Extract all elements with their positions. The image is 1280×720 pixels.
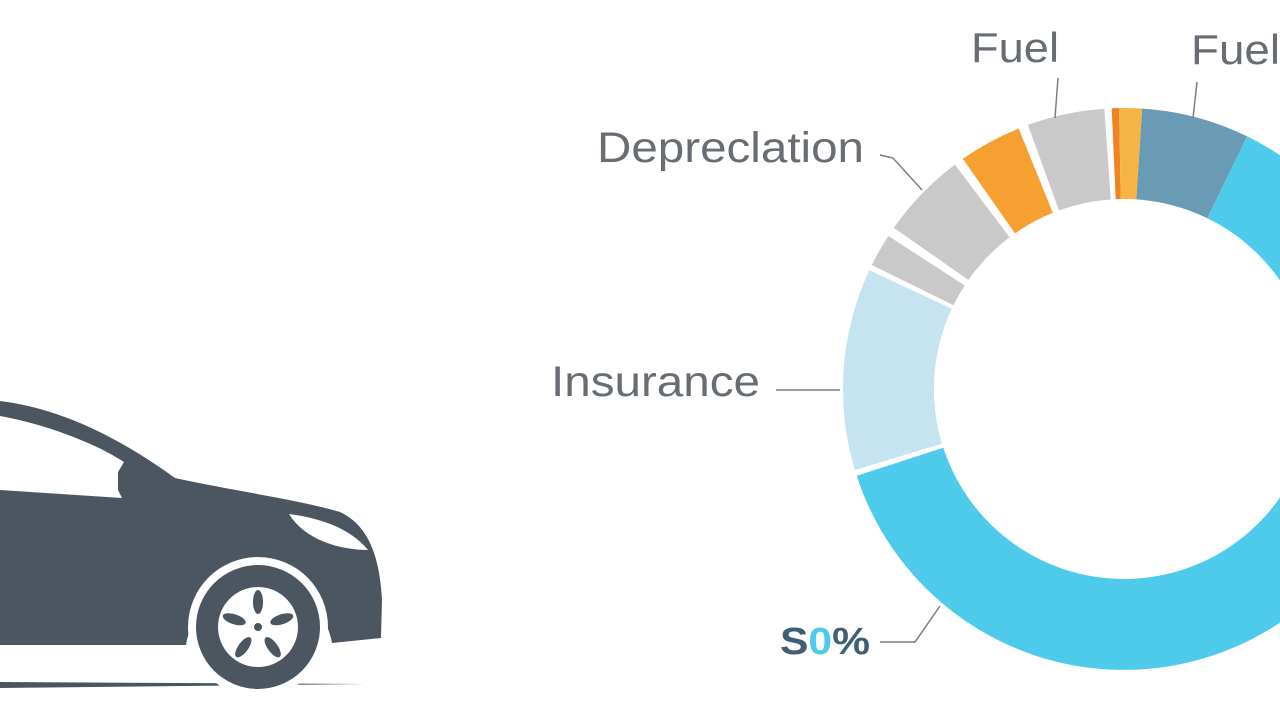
headlight — [289, 514, 368, 550]
segment: blue-gray — [1136, 109, 1247, 218]
segment: small gray — [872, 236, 965, 305]
label: Fuel (left): Fuel — [971, 24, 1059, 71]
icon: car silhouette — [0, 401, 382, 697]
segment: gray (fuel) — [1028, 109, 1111, 210]
label: percentage: S0% — [780, 621, 870, 663]
donut chart — [843, 108, 1280, 670]
leader lines — [776, 78, 1197, 642]
segment: large bright blue — [857, 136, 1280, 670]
label: Depreciation: Depreclation — [597, 124, 864, 172]
segment: orange — [963, 128, 1053, 233]
car body — [0, 401, 382, 645]
label: Fuel (right): Fuel — [1191, 26, 1280, 73]
ground line — [0, 682, 365, 688]
segment: light orange — [1119, 108, 1142, 199]
segment: light blue (insurance) — [843, 270, 952, 470]
label: Insurance: Insurance — [551, 358, 760, 406]
wheel — [188, 557, 328, 697]
segment: dark orange — [1112, 108, 1121, 199]
segment: gray (depreciation) — [894, 165, 1010, 280]
window — [0, 416, 124, 498]
